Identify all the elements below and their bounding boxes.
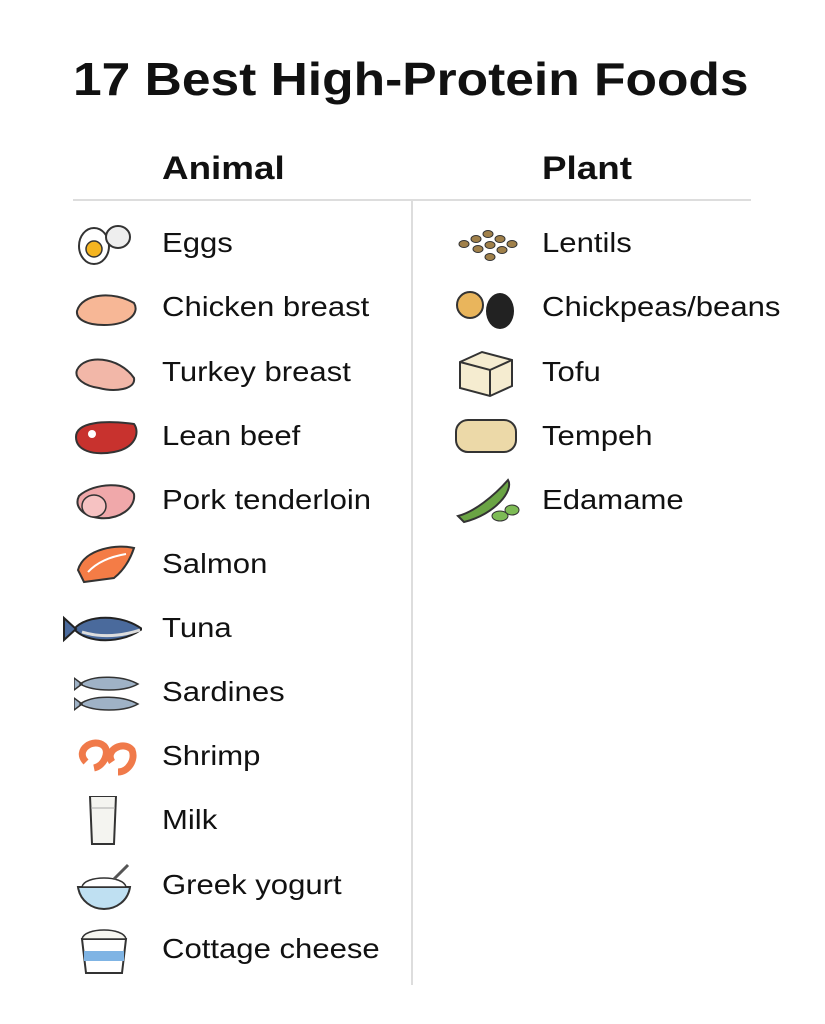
item: milk — [89, 796, 218, 845]
item: chickpeas/beans — [456, 291, 780, 329]
item: lean beef: Lean beef — [162, 420, 300, 451]
item: tuna: Tuna — [162, 612, 232, 643]
heading: Animal: Animal — [162, 150, 285, 186]
item: tofu: Tofu — [542, 356, 601, 387]
item: tuna — [63, 612, 232, 643]
item: edamame: Edamame — [542, 484, 684, 515]
item: milk: Milk — [162, 804, 217, 835]
item: salmon — [77, 546, 267, 584]
item: cottage cheese — [80, 929, 380, 974]
item: chickpeas/beans: Chickpeas/beans — [542, 291, 780, 322]
item: edamame — [456, 478, 684, 524]
item: salmon: Salmon — [162, 548, 267, 579]
item: chicken breast: Chicken breast — [162, 291, 369, 322]
item: eggs — [78, 225, 233, 265]
item: shrimp — [78, 740, 260, 776]
item: lean beef — [75, 420, 300, 454]
column: animal — [63, 225, 380, 974]
item: lentils: Lentils — [542, 227, 632, 258]
item: tempeh: Tempeh — [542, 420, 653, 451]
column: plant — [455, 227, 780, 524]
item: eggs: Eggs — [162, 227, 233, 258]
item: chicken breast — [76, 291, 370, 326]
item: greek yogurt: Greek yogurt — [162, 869, 342, 900]
item: sardines — [74, 676, 285, 711]
title: 17 Best High-Protein Foods — [73, 53, 749, 105]
item: tofu — [459, 351, 601, 397]
item: cottage cheese: Cottage cheese — [162, 933, 380, 964]
item: lentils — [458, 227, 632, 261]
item: tempeh — [455, 419, 653, 453]
item: sardines: Sardines — [162, 676, 285, 707]
item: pork tenderloin: Pork tenderloin — [162, 484, 371, 515]
item: shrimp: Shrimp — [162, 740, 260, 771]
item: turkey breast — [75, 356, 351, 391]
heading: Plant: Plant — [542, 150, 632, 186]
item: greek yogurt — [76, 864, 342, 910]
item: turkey breast: Turkey breast — [162, 356, 351, 387]
item: pork tenderloin — [76, 484, 371, 520]
